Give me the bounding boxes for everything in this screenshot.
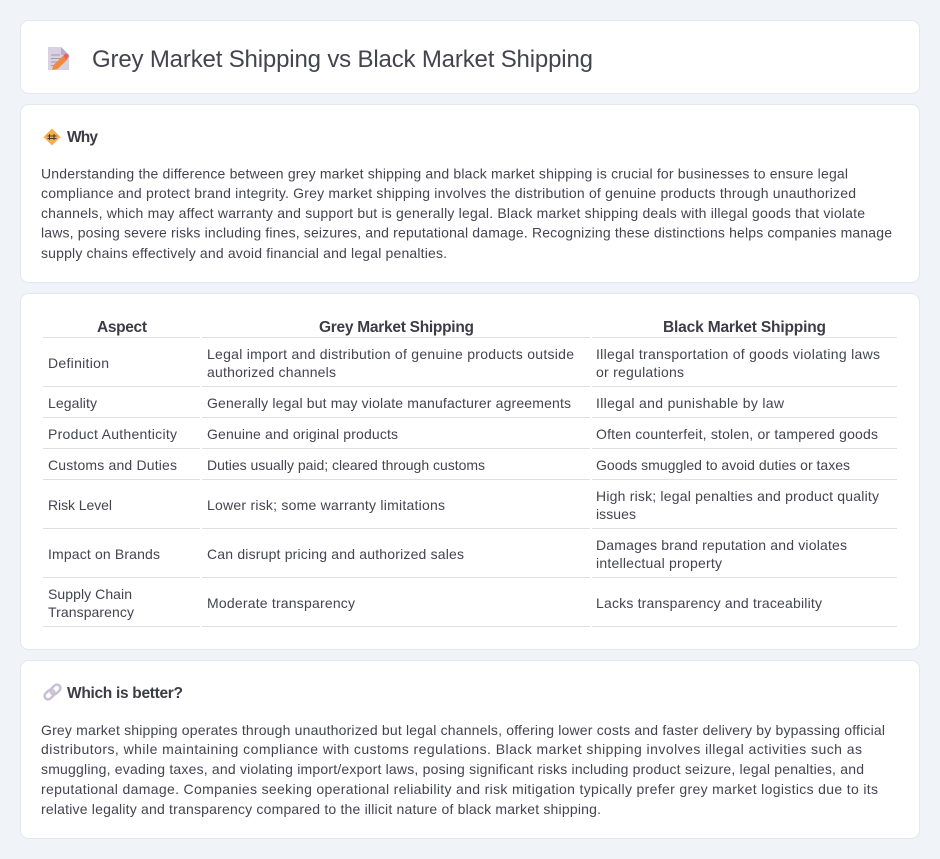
- row: risk level: High risk; legal penalties and product quality: [596, 488, 879, 504]
- row: risk level: Lower risk; some warranty limitations: [207, 497, 445, 513]
- row: product authenticity: Genuine and original products: [207, 426, 398, 442]
- row: impact on brands: Impact on Brands: [48, 546, 160, 562]
- panel: header: [20, 20, 920, 94]
- row: legality: Illegal and punishable by law: [596, 395, 785, 411]
- row: definition: Definition: [48, 355, 109, 371]
- row: supply chain transparency: Supply Chain: [48, 586, 132, 602]
- row: impact on brands: intellectual property: [596, 555, 722, 571]
- text block: why paragraph: compliance and protect brand integrity. Grey market shipping involves the distribution of genuine products through unauthorized: [41, 185, 856, 201]
- row: supply chain transparency: Transparency: [48, 604, 134, 620]
- text block: which is better paragraph: distributors, while maintaining compliance with customs regulations. Black market shipping involves illegal activities such as: [41, 741, 862, 757]
- row: supply chain transparency: [48, 586, 822, 620]
- row: definition: authorized channels: [207, 364, 336, 380]
- row: risk level: issues: [596, 506, 636, 522]
- row: customs and duties: Customs and Duties: [48, 457, 177, 473]
- text block: which is better paragraph: Grey market shipping operates through unauthorized but legal channels, offering lower costs and faster delivery by bypassing official: [41, 722, 885, 738]
- table header row: Black Market Shipping: [663, 319, 826, 336]
- row: impact on brands: Can disrupt pricing and authorized sales: [207, 546, 464, 562]
- table header row: Aspect: [97, 319, 147, 336]
- panel: why: [20, 104, 920, 282]
- table header row: Grey Market Shipping: [319, 319, 474, 336]
- title: Grey Market Shipping vs Black Market Shipping: [92, 46, 593, 73]
- row: product authenticity: Often counterfeit, stolen, or tampered goods: [596, 426, 878, 442]
- row: customs and duties: Duties usually paid; cleared through customs: [207, 457, 485, 473]
- row: definition: [48, 346, 880, 380]
- text block: which is better paragraph: relative legality and transparency compared to the illicit nature of black market shipping.: [41, 801, 601, 817]
- table header row: [97, 319, 826, 336]
- row: risk level: [48, 488, 879, 522]
- row: product authenticity: [48, 426, 878, 442]
- row: legality: Generally legal but may violate manufacturer agreements: [207, 395, 571, 411]
- row: risk level: Risk Level: [48, 497, 112, 513]
- row: definition: or regulations: [596, 364, 684, 380]
- row: definition: Legal import and distribution of genuine products outside: [207, 346, 574, 362]
- row: supply chain transparency: Lacks transparency and traceability: [596, 595, 822, 611]
- text block: why paragraph: [41, 166, 892, 261]
- icon: memo with pencil: [48, 47, 69, 70]
- icon: link: [43, 683, 62, 701]
- text block: which is better paragraph: [41, 722, 885, 817]
- panel: which is better: [20, 660, 920, 838]
- text block: which is better paragraph: smuggling, evading taxes, and violating import/export laws, posing significant risks including product seizure, legal penalties, and: [41, 761, 864, 777]
- row: legality: Legality: [48, 395, 97, 411]
- text block: which is better paragraph: reputational damage. Companies seeking operational reliability and risk mitigation typically prefer grey market logistics due to its: [41, 781, 878, 797]
- text block: why paragraph: Understanding the difference between grey market shipping and black market shipping is crucial for businesses to ensure legal: [41, 166, 848, 182]
- row: customs and duties: Goods smuggled to avoid duties or taxes: [596, 457, 850, 473]
- text block: why paragraph: laws, posing severe risks including fines, seizures, and reputational damage. Recognizing these distinctions helps companies manage: [41, 224, 892, 240]
- row: supply chain transparency: Moderate transparency: [207, 595, 355, 611]
- row: impact on brands: [48, 537, 847, 571]
- text block: why paragraph: supply chains effectively and avoid financial and legal penalties.: [41, 245, 447, 261]
- row: customs and duties: [48, 457, 850, 473]
- heading: why: Why: [67, 129, 98, 146]
- icon: diamond sign: [44, 128, 60, 146]
- text block: why paragraph: channels, which may affect warranty and support but is generally legal. Black market shipping deals with illegal goods that violate: [41, 205, 865, 221]
- panel: comparison table: [20, 294, 920, 650]
- row: legality: [48, 395, 785, 411]
- row: definition: Illegal transportation of goods violating laws: [596, 346, 880, 362]
- row: impact on brands: Damages brand reputation and violates: [596, 537, 847, 553]
- heading: which is better: Which is better?: [67, 685, 183, 702]
- row: product authenticity: Product Authenticity: [48, 426, 177, 442]
